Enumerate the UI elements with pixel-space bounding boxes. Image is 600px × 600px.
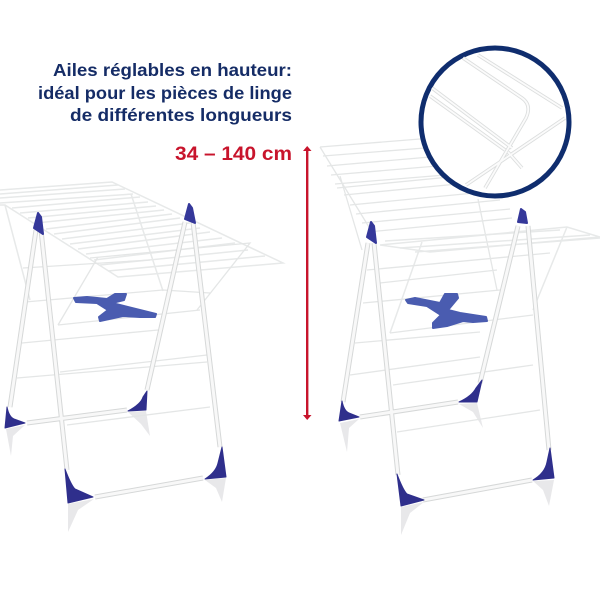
drying rack: raised wings <box>320 139 600 535</box>
rack top wires <box>0 182 283 300</box>
raised back wing wires <box>320 139 512 290</box>
lower wing and wires <box>380 227 600 333</box>
rack top caps <box>34 204 195 234</box>
rack lower wires and wing brackets <box>17 243 250 425</box>
rack legs <box>343 226 549 500</box>
heading: adjustable wings: Ailes réglables en hauteur: <box>53 60 292 80</box>
centre blue hub <box>406 294 487 328</box>
heading: adjustable wings <box>38 60 292 125</box>
centre blue hub <box>74 294 156 321</box>
rack shadows <box>6 411 226 532</box>
blue feet <box>339 380 554 506</box>
magnified wire detail <box>430 55 565 188</box>
rack top caps <box>367 209 527 243</box>
drying rack: lowered wings <box>0 182 283 532</box>
blue feet <box>5 391 226 503</box>
height label: 34 – 140 cm <box>175 144 292 165</box>
heading: adjustable wings: idéal pour les pièces de linge <box>38 83 292 103</box>
rack shadows <box>340 403 554 535</box>
heading: adjustable wings: de différentes longueurs <box>70 105 292 125</box>
rack legs <box>10 222 220 497</box>
arrow: height range <box>303 146 312 420</box>
magnified detail circle <box>421 48 569 196</box>
